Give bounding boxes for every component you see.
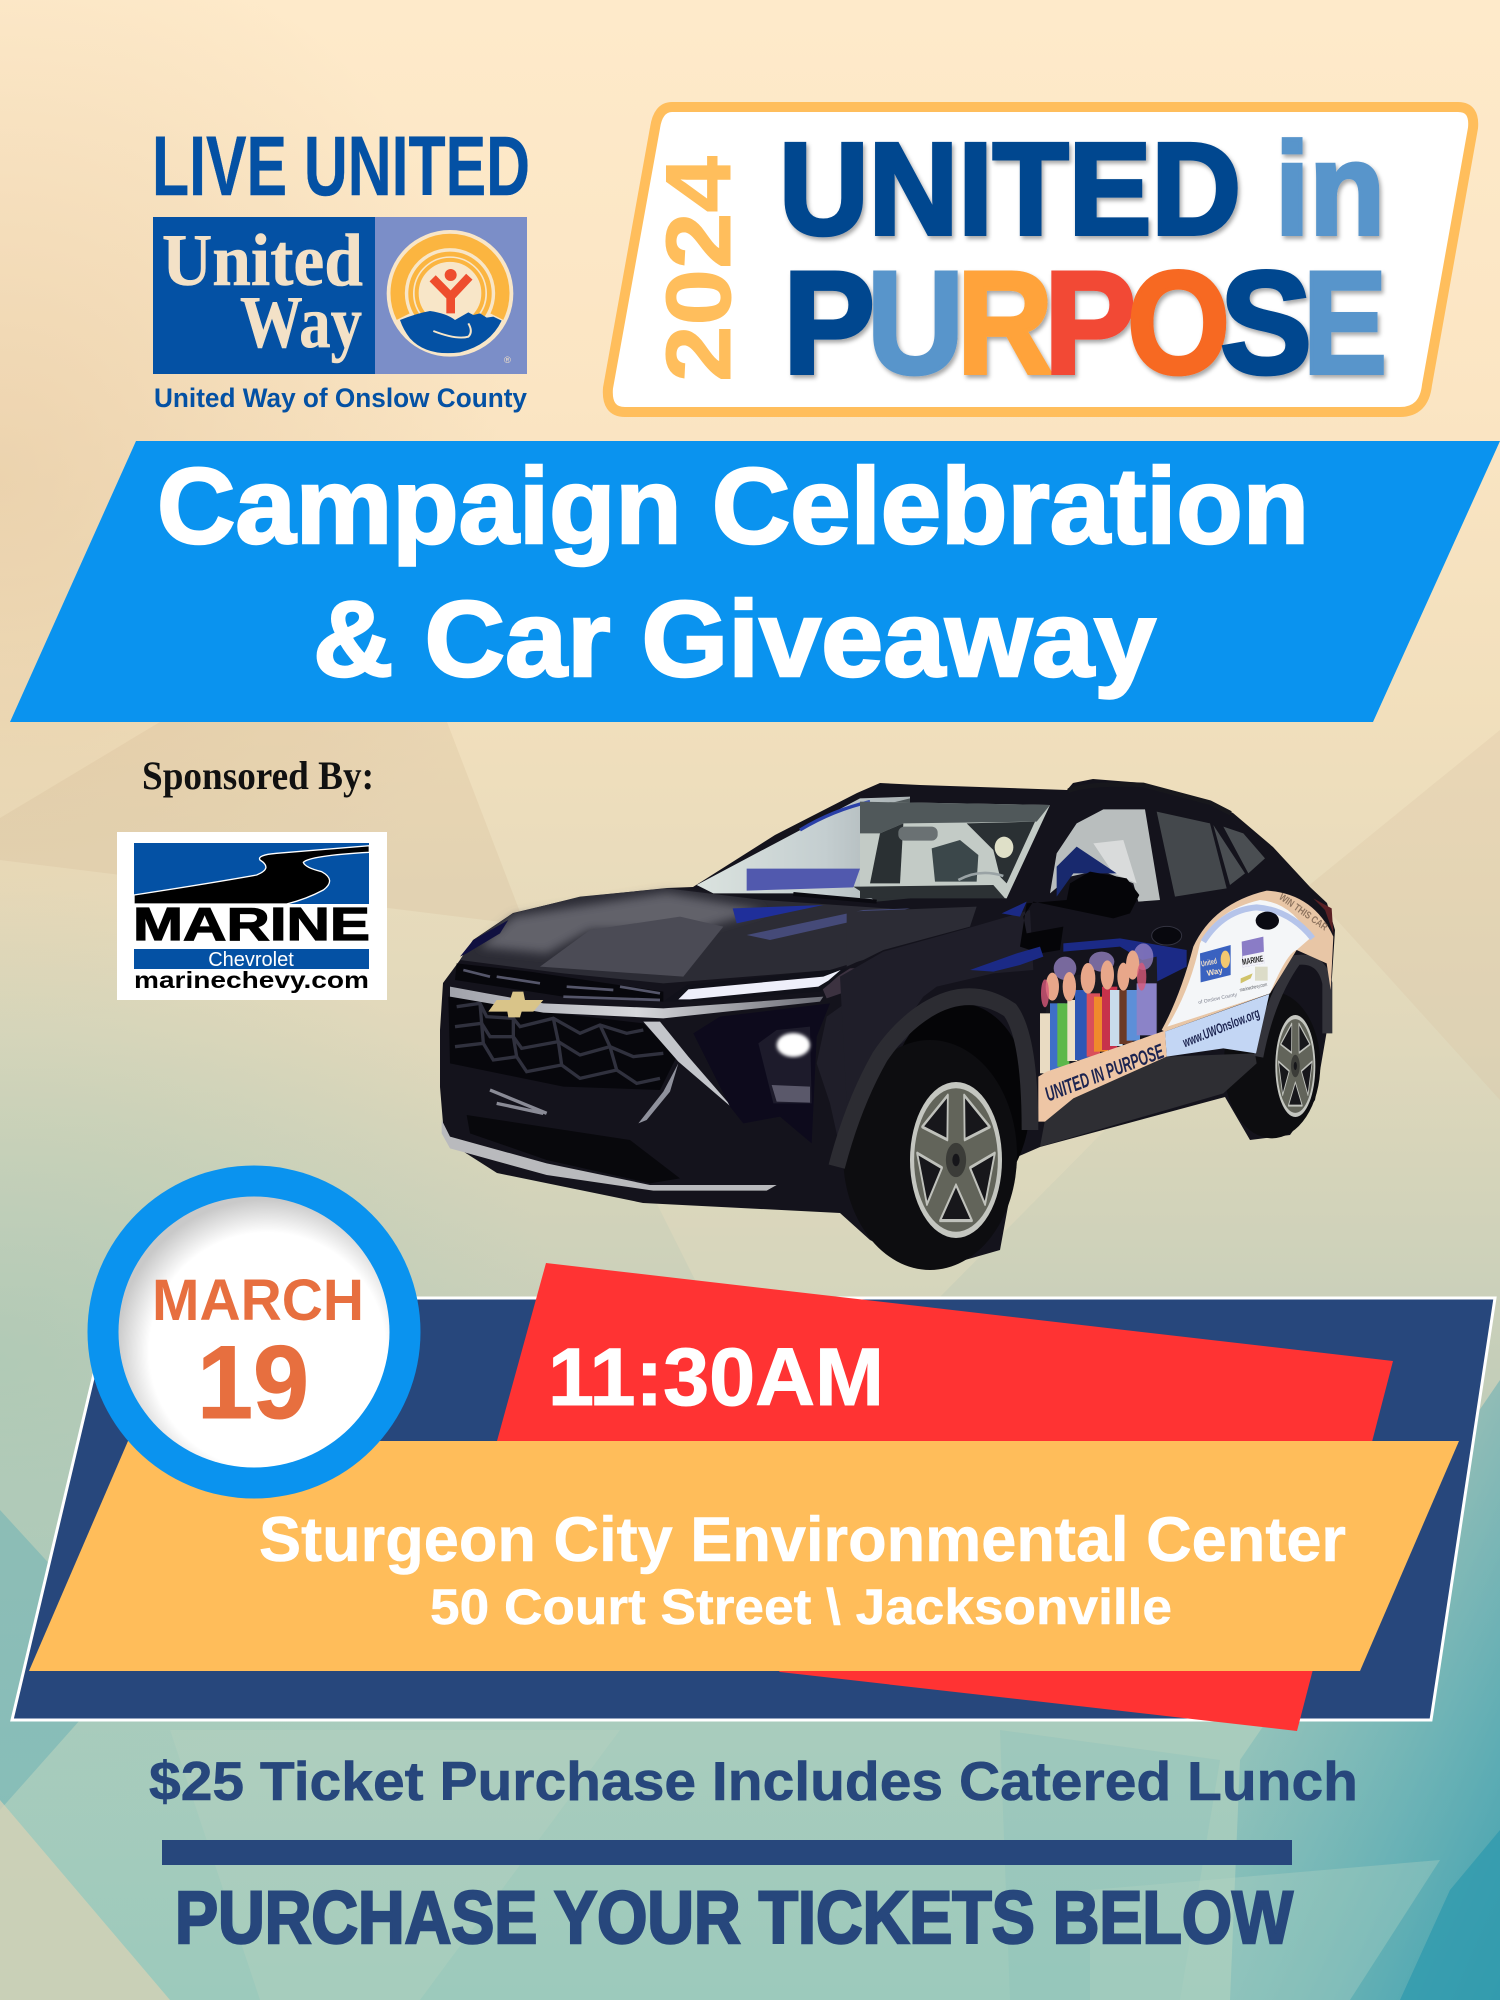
year: 2024 — [648, 156, 750, 382]
county name: United Way of Onslow County — [154, 383, 527, 413]
logo: United Way of Onslow County — [152, 119, 530, 413]
time: 11:30AM — [548, 1332, 884, 1423]
venue address: 50 Court Street \ Jacksonville — [430, 1579, 1172, 1635]
LIVE UNITED tagline: LIVE UNITED — [152, 119, 530, 213]
United Way lockup box: Way — [240, 282, 362, 364]
wrap white panel — [1167, 900, 1310, 1027]
badge frame — [608, 107, 1473, 412]
call to action: PURCHASE YOUR TICKETS BELOW — [175, 1876, 1293, 1959]
wrap peach strip with slogan: UNITED IN PURPOSE — [1042, 1040, 1168, 1106]
front wheel well — [890, 1003, 1030, 1203]
hood side and fender — [840, 907, 1033, 1103]
sponsor logo: Marine Chevrolet — [117, 832, 387, 1000]
venue name: Sturgeon City Environmental Center — [259, 1505, 1346, 1575]
wrap blue band — [1165, 994, 1269, 1057]
main grille — [448, 997, 677, 1090]
month: MARCH — [152, 1268, 364, 1333]
side details — [837, 784, 1333, 1270]
roof rack — [1068, 784, 1231, 813]
front wheel — [843, 1040, 1017, 1270]
wrap United Way logo — [1198, 945, 1238, 1006]
campaign badge: 2024 United in Purpose — [608, 107, 1473, 412]
chrome X blade — [643, 1022, 734, 1109]
wing mirror — [1020, 872, 1139, 953]
wrap rear slogan: WIN THIS CAR — [1277, 892, 1329, 933]
icon: rainbow, person and hand — [387, 230, 513, 365]
banner: Campaign Celebration & Car Giveaway — [10, 441, 1500, 722]
United Way lockup box — [153, 217, 527, 374]
red time card — [497, 1263, 1393, 1731]
sponsor logo: Marine Chevrolet: MARINE — [133, 898, 370, 950]
rear wheel — [1224, 992, 1320, 1138]
chrome trim — [450, 987, 823, 1018]
hood — [460, 888, 910, 983]
wrap peach strip with slogan — [1038, 1031, 1168, 1122]
icon: rainbow, person and hand: ® — [504, 355, 511, 365]
ticket price line: $25 Ticket Purchase Includes Catered Lunch — [149, 1750, 1358, 1812]
United Way lockup box: United — [162, 220, 363, 302]
icon: road — [134, 846, 369, 904]
date badge — [88, 1166, 420, 1498]
fascia panel — [693, 1003, 830, 1143]
PURPOSE: R — [957, 241, 1053, 404]
car body — [440, 779, 1335, 1270]
windshield — [697, 797, 910, 902]
wrap Marine logo: MARINE — [1241, 953, 1264, 967]
front wheel arch — [837, 997, 1030, 1167]
PURPOSE: E — [1303, 241, 1387, 404]
daytime running light — [663, 967, 897, 1002]
UNITED in: in — [1275, 115, 1385, 262]
fender — [817, 967, 910, 1163]
headlight — [758, 1027, 812, 1103]
sponsor logo: Marine Chevrolet: Chevrolet — [208, 949, 294, 971]
wrap website: www.UWOnslow.org — [1180, 1005, 1262, 1050]
wrap United Way logo: Way — [1206, 966, 1224, 978]
door reflections — [970, 902, 1187, 983]
rear taillight — [1313, 898, 1333, 933]
wrap peach swoosh — [1162, 891, 1333, 1032]
bowtie emblem — [488, 992, 543, 1017]
banner heading: & Car Giveaway — [313, 578, 1156, 699]
yellow venue band — [29, 1441, 1459, 1671]
side windows — [1050, 809, 1265, 902]
PURPOSE — [783, 241, 1387, 404]
rear door handle — [1256, 912, 1279, 930]
PURPOSE: U — [867, 241, 964, 404]
rear wheel arch — [1258, 960, 1327, 1057]
wrap United Way logo: United — [1200, 956, 1218, 969]
PURPOSE: P — [783, 241, 875, 404]
event panel — [12, 1263, 1495, 1731]
wrap Marine logo: marinechevy.com — [1239, 982, 1268, 994]
front details — [442, 797, 910, 1191]
upper grille — [455, 963, 663, 1002]
navy parallelogram — [12, 1298, 1495, 1720]
day: 19 — [197, 1325, 309, 1441]
wrap Marine logo — [1239, 937, 1268, 994]
wrap people illustration — [1040, 943, 1158, 1073]
banner heading — [157, 445, 1309, 699]
sill — [1040, 1053, 1257, 1147]
lower bumper — [442, 1090, 777, 1191]
car photo: wrapped Chevrolet SUV — [440, 779, 1335, 1270]
PURPOSE: S — [1220, 241, 1312, 404]
cabin through windshield — [860, 802, 1050, 898]
door handle — [1152, 926, 1182, 945]
UNITED in: UNITED — [779, 115, 1241, 262]
banner heading: Campaign Celebration — [157, 445, 1309, 566]
PURPOSE: P — [1044, 241, 1136, 404]
sponsor label: Sponsored By: — [142, 753, 374, 798]
sponsor logo: Marine Chevrolet: marinechevy.com — [134, 967, 369, 993]
wrap United Way logo: of Onslow County — [1198, 992, 1238, 1006]
PURPOSE: O — [1127, 241, 1230, 404]
